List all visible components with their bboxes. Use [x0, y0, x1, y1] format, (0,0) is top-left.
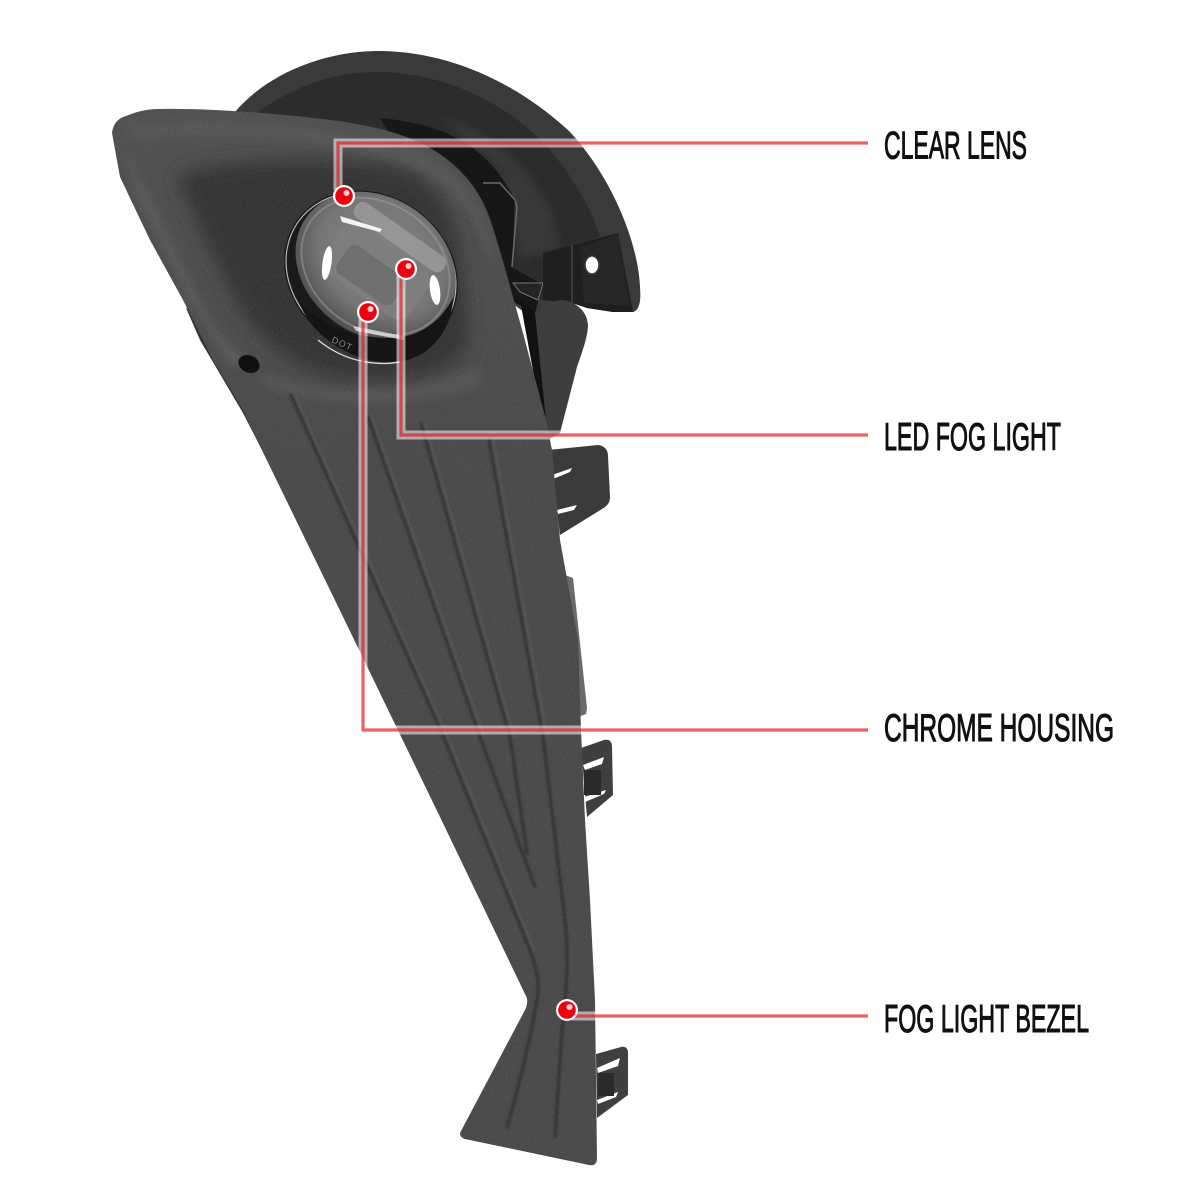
bezel screw hole [235, 352, 263, 376]
clip middle [581, 740, 613, 817]
leader line: chrome housing [363, 318, 868, 730]
callout: LED fog light [395, 258, 1061, 459]
clip top [548, 445, 610, 535]
marker dot: fog light bezel [556, 999, 578, 1021]
rear housing dome [235, 51, 640, 320]
callout: chrome housing [357, 301, 1114, 750]
leader line: clear lens [338, 143, 868, 190]
lens highlights [320, 216, 442, 340]
callout: clear lens [333, 124, 1027, 207]
leader line: fog light bezel [572, 1012, 868, 1020]
marker dot: clear lens [333, 185, 355, 207]
infographic canvas [112, 51, 1113, 1166]
leader line: LED fog light [401, 275, 868, 435]
bezel recess shading [176, 160, 468, 380]
callout: fog light bezel [556, 998, 1089, 1041]
under-bezel lip [186, 308, 290, 450]
label: clear lens: CLEAR LENS [884, 124, 1027, 168]
marker dot: chrome housing [357, 301, 379, 323]
product: fog light and bezel assembly [100, 51, 640, 1170]
bezel grain texture [100, 100, 610, 1170]
lens inner module [317, 218, 435, 325]
mounting bracket with hole [543, 233, 633, 312]
clip bottom [596, 1047, 628, 1118]
marker dot: LED fog light [395, 258, 417, 280]
lens lower dark rim [298, 298, 453, 362]
mounting tongue [520, 300, 588, 440]
lens body [252, 157, 490, 389]
lens DOT marking: DOT [330, 335, 354, 353]
clip side tab [565, 575, 587, 717]
label: LED fog light: LED FOG LIGHT [884, 416, 1061, 459]
fog lens [252, 157, 490, 389]
bezel ridges [291, 395, 567, 1137]
lamp body behind bezel [380, 118, 543, 313]
fog light bezel [100, 100, 610, 1170]
